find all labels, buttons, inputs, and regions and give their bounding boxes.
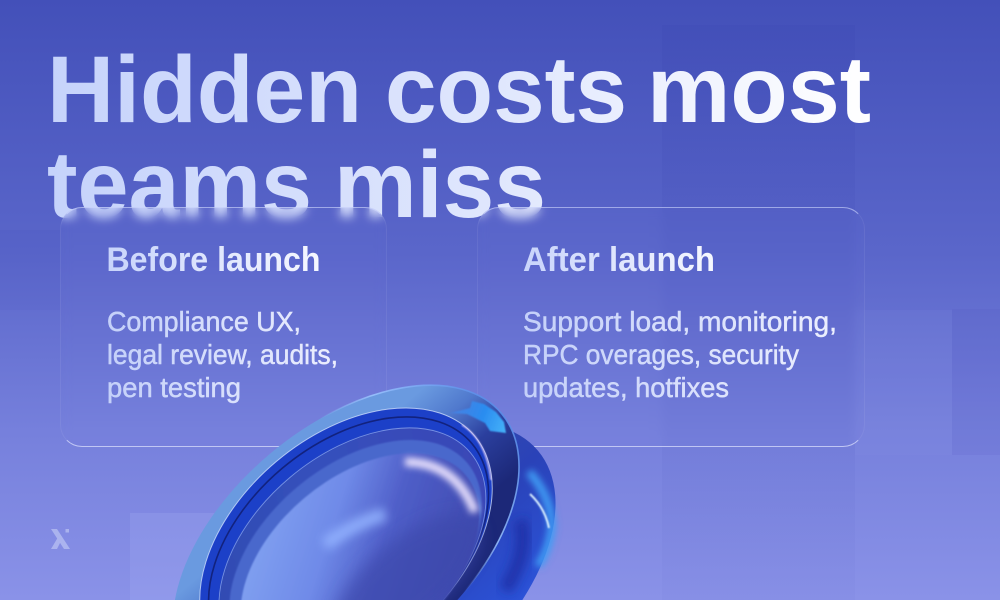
text: before launch items [107,306,338,403]
title: teams [47,132,312,238]
panel: before launch [60,207,387,447]
back cyan reflections [529,472,552,566]
title: most [647,37,871,143]
panel: after launch [477,207,865,447]
front rim [115,323,577,600]
ring band [172,378,533,600]
text: before launch items: pen testing [107,372,241,403]
text: after launch items: updates, hotfixes [523,372,729,403]
cyan highlight [450,401,506,433]
ring dark line [159,365,538,600]
text: after launch items: Support load, monitoring, [523,306,837,337]
title: costs [385,37,627,143]
ring lavender glint [462,425,491,480]
heading: after launch: After launch [523,241,715,279]
text: before launch items: Compliance UX, [107,306,301,337]
text: after launch items [523,306,837,403]
ring second band [185,393,526,600]
dish white highlight [405,462,475,512]
title: miss [334,132,546,238]
text: after launch items: RPC overages, security [523,339,799,370]
text: before launch items: legal review, audits, [107,339,338,370]
title: Hidden [47,37,362,143]
inner ring [148,353,544,600]
back body [151,360,614,600]
dish [199,409,521,600]
heading: before launch: Before launch [106,241,320,279]
rim bright edge [115,323,577,600]
back deep shadow [505,520,523,590]
dish light streak [325,514,385,545]
